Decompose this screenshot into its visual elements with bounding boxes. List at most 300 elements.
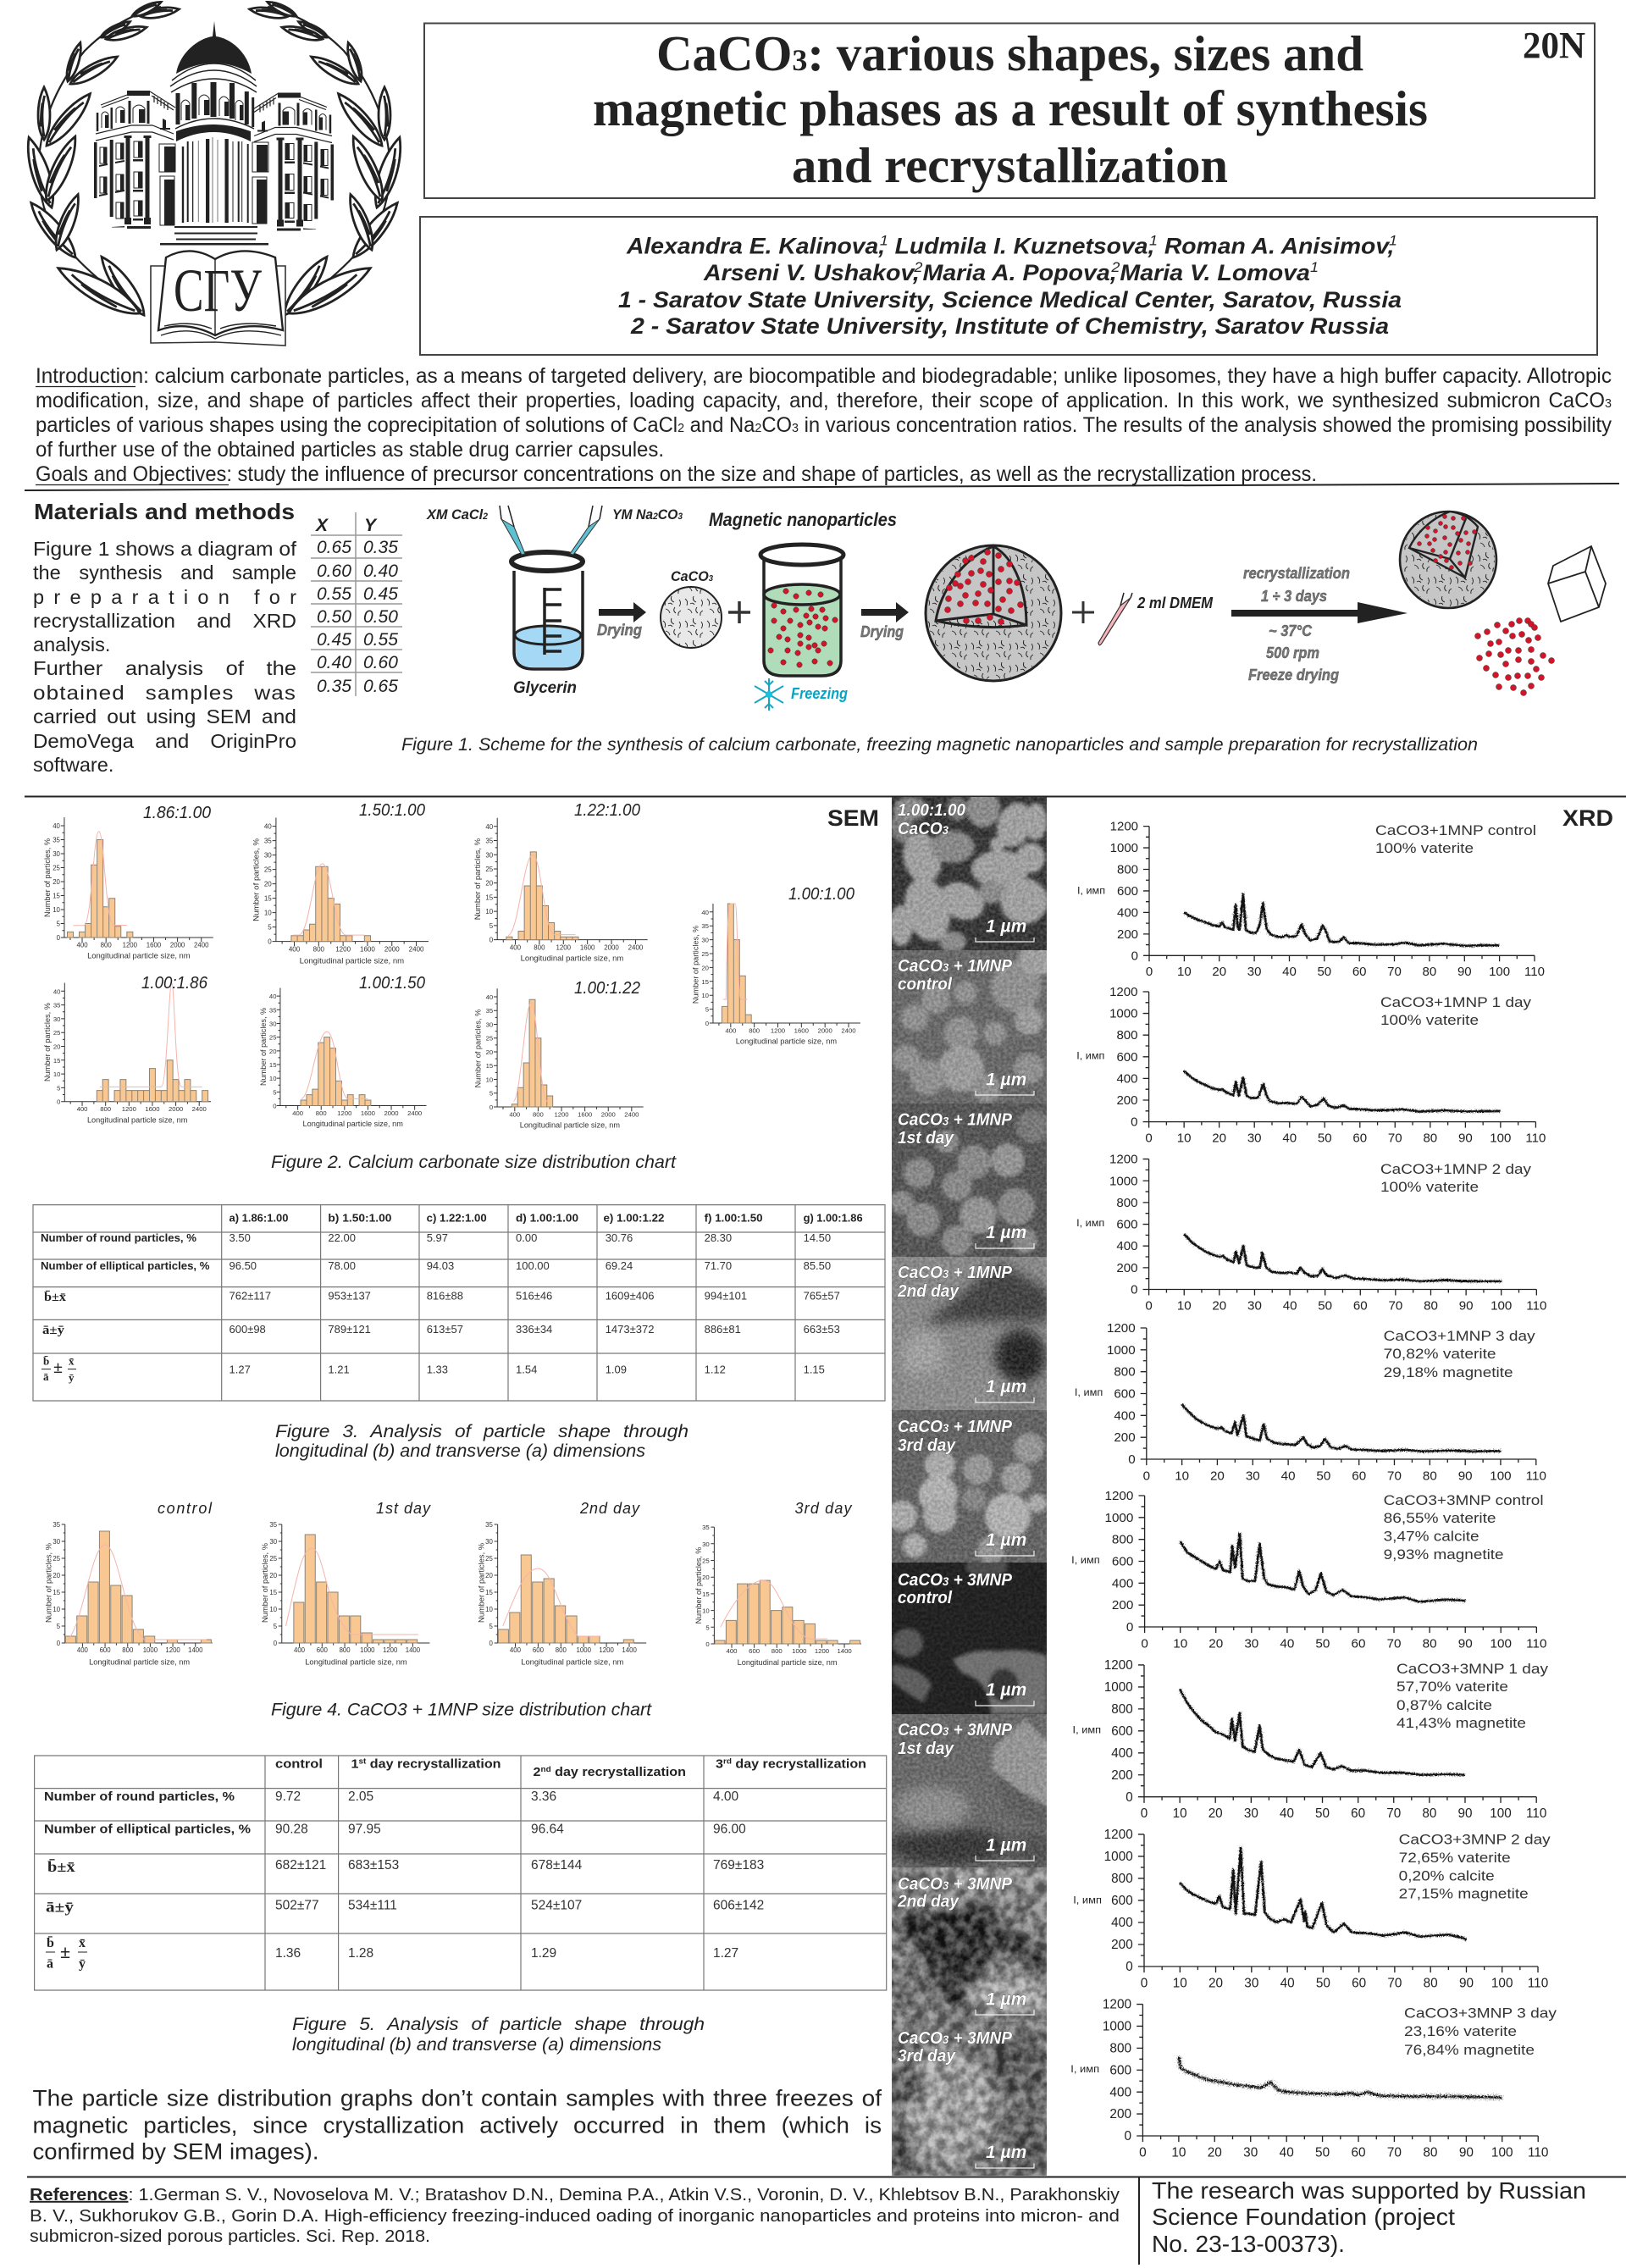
chart: histogram 3rd day: 800 xyxy=(772,1647,783,1655)
chart: histogram 1.00:1.22: 30 xyxy=(486,1021,493,1028)
chart: histogram control: Longitudinal particle size, nm xyxy=(89,1658,190,1667)
table: particle shape analysis figure 5: nd xyxy=(540,1765,551,1773)
chart: histogram 1.00:1.00: 25 xyxy=(701,950,709,958)
arrow: second drying: Drying xyxy=(860,623,904,640)
chart: XRD CaCO3+3MNP 2 day: 1000 xyxy=(1104,1850,1133,1864)
table: particle shape analysis figure 3: 0.00 xyxy=(516,1231,537,1244)
text block: materials and methods: software. xyxy=(33,754,113,776)
chart: histogram 1.00:1.22: 25 xyxy=(486,1035,493,1043)
chart: histogram 1.00:1.22: 0 xyxy=(489,1104,493,1111)
chart: histogram 1.86:1.00 xyxy=(43,817,213,960)
table: particle shape analysis figure 3: 816±88 xyxy=(427,1289,463,1303)
table: X and Y concentrations: 0.55 xyxy=(363,630,398,650)
chart: XRD CaCO3+3MNP 3 day: 110 xyxy=(1528,2145,1548,2160)
text block: introduction and goals: of further use of the obtained particles as stable drug carrier capsules. xyxy=(36,438,664,462)
table: X and Y concentrations: 0.40 xyxy=(363,561,398,581)
chart: histogram 1.22:1.00 xyxy=(473,818,648,962)
chart: XRD CaCO3+3MNP 2 day xyxy=(1073,1828,1548,1990)
chart: XRD CaCO3+3MNP 2 day: 40 xyxy=(1280,1976,1295,1990)
chart label: 1.00:1.50: 1.00:1.50 xyxy=(359,974,425,993)
table: particle shape analysis figure 3: 600±98 xyxy=(229,1323,266,1336)
icon: snowflake and freezing label xyxy=(755,678,848,711)
chart: XRD CaCO3+3MNP 3 day: 400 xyxy=(1109,2085,1131,2099)
chart: histogram 1.50:1.00: 800 xyxy=(313,945,325,953)
arrow: first drying: Drying xyxy=(597,622,642,639)
chart: XRD CaCO3+3MNP 2 day: I, имп xyxy=(1073,1895,1102,1906)
table: particle shape analysis figure 3: 516±46 xyxy=(516,1289,552,1303)
panel: SEM CaCO3 + 3MNP 2nd day: 2nd day xyxy=(897,1892,960,1911)
text block: materials and methods: the synthesis and sample xyxy=(33,561,296,584)
chart: histogram 2nd day: 15 xyxy=(485,1589,494,1596)
chart label: 3MNP 2 day composition: 0,20% calcite xyxy=(1399,1868,1495,1884)
chart: histogram 2nd day: 35 xyxy=(485,1521,494,1529)
panel: authors and affiliations: Maria V. Lomova xyxy=(1120,260,1310,285)
chart: histogram 1.00:1.86: 20 xyxy=(53,1043,60,1050)
chart: XRD CaCO3+1MNP 2 day: 1000 xyxy=(1109,1174,1138,1188)
table: particle shape analysis figure 5: 4.00 xyxy=(713,1790,739,1804)
icon: particle with magnetic nanoparticles in wedge xyxy=(926,545,1061,681)
table: particle shape analysis figure 5: Number of elliptical particles, % xyxy=(44,1823,251,1837)
table: particle shape analysis figure 3: 71.70 xyxy=(705,1259,732,1272)
chart label: 3MNP 1 day composition: 57,70% vaterite xyxy=(1396,1679,1508,1695)
table: particle shape analysis figure 3: 1.54 xyxy=(516,1364,537,1376)
chart: XRD CaCO3+1MNP control: 10 xyxy=(1177,965,1192,979)
table: particle shape analysis figure 3: 1.15 xyxy=(804,1364,825,1376)
chart: XRD CaCO3+1MNP 1 day: 800 xyxy=(1116,1028,1138,1043)
chart: XRD CaCO3+1MNP control: 1200 xyxy=(1110,820,1138,834)
panel: authors and affiliations: Roman A. Anisimov, xyxy=(1158,234,1394,259)
chart: histogram control: 600 xyxy=(100,1646,111,1654)
table: particle shape analysis figure 3: ā xyxy=(43,1370,49,1383)
chart: XRD CaCO3+3MNP 1 day: 90 xyxy=(1458,1806,1472,1821)
chart: histogram 1.00:1.00: 5 xyxy=(705,1006,709,1014)
chart: XRD CaCO3+3MNP 2 day: 90 xyxy=(1459,1976,1474,1990)
chart: histogram 2nd day: 600 xyxy=(533,1646,545,1654)
chart: XRD CaCO3+3MNP control: 1200 xyxy=(1104,1489,1133,1503)
chart: XRD CaCO3+1MNP 1 day: 200 xyxy=(1116,1093,1138,1108)
chart: XRD CaCO3+1MNP control: I, имп xyxy=(1077,884,1105,896)
chart label: 1MNP control composition: CaCO3+1MNP control xyxy=(1375,822,1536,838)
chart: histogram 1.86:1.00: 10 xyxy=(53,906,61,914)
panel: SEM CaCO3 + 3MNP control xyxy=(892,1557,1047,1714)
text block: funding acknowledgement: Science Foundation (project xyxy=(1152,2204,1455,2230)
chart: histogram 1.00:1.86: Number of particles, % xyxy=(43,1003,52,1081)
chart: histogram 1st day: 0 xyxy=(274,1640,278,1647)
caption: figure 3: longitudinal (b) and transverse (a) dimensions xyxy=(275,1441,645,1461)
text block: note on distribution graphs: The particle size distribution graphs don’t contain samples with three freezes of xyxy=(32,2086,882,2111)
table: particle shape analysis figure 5: b̄ xyxy=(47,1934,54,1950)
table: particle shape analysis figure 3: 953±137 xyxy=(328,1289,371,1303)
chart: XRD CaCO3+1MNP 2 day: 110 xyxy=(1526,1299,1546,1314)
text block: references: References : 1.German S. V., Novoselova M. V.; Bratashov D.N., Demina P.A., Atkin V.S., Voronin, D. V., Khlebtsov B.N., Parakhonskiy xyxy=(30,2186,1120,2204)
chart: histogram 1.22:1.00: 400 xyxy=(510,943,522,951)
panel: authors and affiliations: 1 xyxy=(880,233,888,249)
table: particle shape analysis figure 5: day recrystallization xyxy=(366,1758,501,1772)
chart: histogram 1.00:1.22: 400 xyxy=(509,1110,520,1118)
icon: recrystallized particle xyxy=(1400,512,1496,608)
table: particle shape analysis figure 5: 1.27 xyxy=(713,1946,738,1961)
chart: XRD CaCO3+1MNP 1 day: 110 xyxy=(1525,1131,1546,1146)
table: particle shape analysis figure 3: 3.50 xyxy=(229,1231,251,1244)
chart: histogram control: 1000 xyxy=(143,1646,158,1654)
chart: histogram 1.00:1.22: 40 xyxy=(486,993,493,1001)
chart: histogram 1st day: 400 xyxy=(294,1646,306,1654)
table: particle shape analysis figure 5: 1 xyxy=(351,1758,358,1772)
text block: introduction and goals: Goals and Objectives: study the influence of precursor concentrations on the size and shape of particles, as well as the recrystallization process. xyxy=(36,462,1317,486)
chart: histogram 1.50:1.00: 2400 xyxy=(409,945,424,953)
chart: XRD CaCO3+3MNP 1 day: 60 xyxy=(1351,1806,1365,1821)
table: particle shape analysis figure 3: b̄±x̄ xyxy=(44,1291,67,1304)
table: particle shape analysis figure 5: 1.36 xyxy=(275,1946,301,1961)
chart label: 3MNP control composition: 3,47% calcite xyxy=(1384,1528,1479,1544)
chart: XRD CaCO3+1MNP 2 day: 200 xyxy=(1116,1261,1138,1275)
chart: XRD CaCO3+3MNP control: 50 xyxy=(1315,1636,1330,1651)
table: X and Y concentrations: 0.45 xyxy=(317,630,351,650)
chart: histogram 1.50:1.00: 40 xyxy=(264,823,272,831)
chart: histogram 1.86:1.00: 20 xyxy=(53,878,61,886)
chart: histogram 1.00:1.50: 1200 xyxy=(337,1109,351,1117)
arrow: recrystallization conditions: 1 ÷ 3 days xyxy=(1261,588,1327,605)
chart: histogram 1.86:1.00: 0 xyxy=(57,934,61,942)
chart: XRD CaCO3+1MNP 2 day: 70 xyxy=(1388,1299,1402,1314)
chart: XRD CaCO3+1MNP 1 day: 100 xyxy=(1490,1131,1511,1146)
chart: histogram 3rd day: 30 xyxy=(702,1541,710,1548)
chart: histogram 3rd day: 35 xyxy=(702,1524,710,1531)
chart: histogram 2nd day: Longitudinal particle size, nm xyxy=(521,1658,623,1667)
caption: figure 3 xyxy=(275,1422,689,1461)
chart: histogram 1.22:1.00: 35 xyxy=(485,838,494,845)
chart: histogram 1.00:1.50: 5 xyxy=(273,1088,276,1096)
chart: XRD CaCO3+1MNP 1 day: 0 xyxy=(1145,1131,1153,1146)
arrow: second drying xyxy=(860,602,909,640)
panel: SEM CaCO3 + 1MNP 3rd day xyxy=(887,1410,1047,1563)
chart: histogram 1st day: Number of particles, % xyxy=(261,1543,269,1623)
chart: histogram 1.00:1.50: Longitudinal particle size, nm xyxy=(303,1120,403,1128)
chart: histogram 1.00:1.22: 15 xyxy=(486,1062,493,1070)
chart: XRD CaCO3+3MNP 1 day: 10 xyxy=(1173,1806,1187,1821)
chart: XRD CaCO3+3MNP 1 day: 1000 xyxy=(1104,1680,1133,1695)
chart: histogram 1.22:1.00: 2000 xyxy=(604,943,619,951)
chart: XRD CaCO3+3MNP 3 day: 1000 xyxy=(1103,2020,1131,2034)
caption: figure 1: Figure 1. Scheme for the synthesis of calcium carbonate, freezing magnetic nanoparticles and sample preparation for recrystallization xyxy=(401,735,1478,755)
table: particle shape analysis figure 3: 78.00 xyxy=(328,1259,356,1272)
chart: histogram 1.22:1.00: 1600 xyxy=(580,943,595,951)
chart label: 3MNP control composition: CaCO3+3MNP control xyxy=(1384,1492,1544,1508)
chart: histogram 1.00:1.00: 2400 xyxy=(841,1026,856,1034)
chart: XRD CaCO3+1MNP 3 day: 400 xyxy=(1114,1408,1136,1423)
chart: histogram 3rd day: 25 xyxy=(702,1557,710,1564)
panel: title box xyxy=(424,24,1595,198)
icon: snowflake and freezing label: Freezing xyxy=(791,685,848,702)
table: particle shape analysis figure 5: 678±144 xyxy=(531,1858,583,1872)
chart: XRD CaCO3+1MNP 3 day: 800 xyxy=(1114,1365,1136,1380)
chart: histogram 2nd day xyxy=(477,1521,646,1667)
panel: SEM CaCO3 + 3MNP 2nd day xyxy=(888,1866,1047,2022)
text block: introduction and goals: Introduction: calcium carbonate particles, as a means of targeted delivery, are biocompatible and biodegradable; unlike liposomes, they have a high buffer capacity. Allotropic xyxy=(36,364,1612,388)
chart: histogram 1.00:1.50: 40 xyxy=(269,993,276,1000)
chart: XRD CaCO3+3MNP 1 day: 40 xyxy=(1280,1806,1294,1821)
table: particle shape analysis figure 3: d) 1.00:1.00 xyxy=(516,1213,578,1225)
chart: XRD CaCO3+1MNP 2 day: 100 xyxy=(1490,1299,1512,1314)
chart label: 3MNP 3 day composition: CaCO3+3MNP 3 day xyxy=(1404,2005,1557,2022)
chart: histogram 1.00:1.00 xyxy=(692,904,860,1045)
chart label: 1MNP 1 day composition xyxy=(1380,994,1532,1028)
panel: SEM CaCO3 + 1MNP 1st day: 1 µm xyxy=(986,1223,1026,1242)
table: particle shape analysis figure 3: 886±81 xyxy=(705,1323,741,1336)
chart: XRD CaCO3+1MNP 3 day: 110 xyxy=(1526,1469,1546,1483)
chart: XRD CaCO3+3MNP 2 day: 600 xyxy=(1111,1894,1133,1908)
arrow: recrystallization conditions: Freeze drying xyxy=(1248,667,1339,683)
table: particle shape analysis figure 3: ȳ xyxy=(69,1371,75,1384)
chart: XRD CaCO3+1MNP 3 day: 100 xyxy=(1490,1469,1512,1483)
chart label: 3MNP control composition: 86,55% vaterite xyxy=(1384,1510,1496,1526)
chart: histogram 2nd day: 30 xyxy=(485,1538,494,1546)
table: particle shape analysis figure 3: 762±117 xyxy=(229,1289,271,1303)
chart: histogram 1st day: 600 xyxy=(317,1646,328,1654)
text block: references: submicron-sized porous particles. Sci. Rep. 2018. xyxy=(30,2227,430,2246)
text block: references: B. V., Sukhorukov G.B., Gorin D.A. High-efficiency freezing-induced oading of inorganic nanoparticles and proteins into micron- and xyxy=(30,2207,1120,2226)
icon: pipettes and glycerin beaker xyxy=(500,506,602,669)
icon: CaCO3 particle: CaCO3 xyxy=(671,568,713,584)
chart: histogram 3rd day: 0 xyxy=(705,1640,710,1648)
table: particle shape analysis figure 3: 336±34 xyxy=(516,1323,552,1336)
chart: XRD CaCO3+3MNP 1 day: 600 xyxy=(1111,1724,1133,1739)
panel: SEM CaCO3 + 3MNP 3rd day: CaCO3 + 3MNP xyxy=(898,2029,1013,2048)
chart: histogram 1.00:1.00: Longitudinal particle size, nm xyxy=(736,1037,837,1045)
chart: histogram 1.00:1.86: 1200 xyxy=(122,1105,136,1113)
table: particle shape analysis figure 5: ± xyxy=(60,1941,70,1962)
chart: XRD CaCO3+1MNP 1 day: I, имп xyxy=(1076,1049,1104,1061)
chart: histogram 1.00:1.50: 30 xyxy=(269,1020,276,1027)
chart: histogram 1.86:1.00: 400 xyxy=(77,942,88,949)
chart: XRD CaCO3+1MNP 3 day: 90 xyxy=(1458,1469,1473,1483)
chart label: 3rd day: 3rd day xyxy=(794,1500,852,1517)
chart: histogram 1.00:1.00: 35 xyxy=(701,922,709,930)
chart: histogram 1st day: 1400 xyxy=(406,1646,421,1654)
chart: histogram 3rd day: 20 xyxy=(702,1574,710,1581)
chart: histogram 3rd day: Number of particles, % xyxy=(694,1547,703,1624)
chart: histogram 1.00:1.50: 0 xyxy=(273,1102,276,1109)
chart label: 1MNP 2 day composition: 100% vaterite xyxy=(1380,1179,1479,1195)
chart label: 1MNP 3 day composition: 70,82% vaterite xyxy=(1384,1346,1496,1362)
chart label: 3MNP 3 day composition: 23,16% vaterite xyxy=(1404,2023,1517,2039)
chart: XRD CaCO3+1MNP 3 day: 200 xyxy=(1114,1430,1136,1445)
chart: histogram 3rd day: 1200 xyxy=(815,1647,829,1655)
chart: XRD CaCO3+3MNP 1 day: 80 xyxy=(1422,1806,1436,1821)
chart: histogram 2nd day: 1000 xyxy=(576,1646,592,1654)
panel: authors and affiliations: 2 - Saratov State University, Institute of Chemistry, Saratov Russia xyxy=(630,313,1389,339)
chart: histogram control: 0 xyxy=(57,1640,61,1647)
chart: XRD CaCO3+3MNP 3 day: I, имп xyxy=(1070,2063,1099,2075)
chart label: 3MNP 3 day composition: 76,84% magnetite xyxy=(1404,2042,1535,2058)
chart: histogram 2nd day: 400 xyxy=(510,1646,522,1654)
chart: XRD CaCO3+1MNP 1 day: 30 xyxy=(1247,1131,1262,1146)
panel: SEM CaCO3 + 1MNP 3rd day: 1 µm xyxy=(986,1530,1026,1550)
panel: SEM CaCO3 + 1MNP 2nd day xyxy=(892,1257,1050,1410)
chart: histogram 1st day: Longitudinal particle size, nm xyxy=(305,1658,407,1667)
chart: histogram 1.00:1.50: 800 xyxy=(316,1109,327,1117)
arrow: recrystallization conditions: ~ 37°C xyxy=(1269,622,1313,639)
table: X and Y concentrations: 0.35 xyxy=(317,677,351,696)
chart: XRD CaCO3+1MNP control: 400 xyxy=(1117,905,1138,920)
chart: histogram 1.00:1.86: 800 xyxy=(100,1105,111,1113)
panel: SEM CaCO3 + 3MNP 1st day xyxy=(889,1714,1059,1869)
chart label: 1st day: 1st day xyxy=(376,1500,431,1517)
table: particle shape analysis figure 3: b̄ xyxy=(43,1355,49,1368)
panel: authors and affiliations: Alexandra E. Kalinova, xyxy=(627,234,873,259)
chart: histogram 2nd day: 1400 xyxy=(622,1646,637,1654)
table: particle shape analysis figure 3: b) 1.50:1.00 xyxy=(328,1213,391,1225)
chart: XRD CaCO3+1MNP 2 day: 600 xyxy=(1116,1218,1138,1232)
chart: histogram 1.00:1.86: 400 xyxy=(77,1105,87,1113)
chart: XRD CaCO3+3MNP 1 day: 800 xyxy=(1111,1702,1133,1717)
chart: XRD CaCO3+1MNP 2 day: 60 xyxy=(1353,1299,1368,1314)
chart: histogram 1.00:1.86: 10 xyxy=(53,1070,60,1078)
chart: XRD CaCO3+1MNP 1 day: 1000 xyxy=(1109,1007,1138,1021)
chart: histogram 1.00:1.22: 2400 xyxy=(624,1110,639,1118)
chart label: 1MNP control composition: 100% vaterite xyxy=(1375,840,1474,856)
chart: XRD CaCO3+3MNP control: 70 xyxy=(1387,1636,1402,1651)
chart: XRD CaCO3+3MNP 2 day: 10 xyxy=(1173,1976,1187,1990)
chart: histogram 1st day xyxy=(261,1521,429,1667)
chart: histogram 1.86:1.00: 1600 xyxy=(147,942,162,949)
chart: XRD CaCO3+3MNP control: 200 xyxy=(1112,1598,1133,1612)
text block: materials and methods: analysis. xyxy=(33,633,110,656)
table: particle shape analysis figure 3: 96.50 xyxy=(229,1259,257,1272)
table: X and Y concentrations: 0.45 xyxy=(363,584,398,604)
table: particle shape analysis figure 5: 9.72 xyxy=(275,1790,301,1804)
chart label: 1MNP 3 day composition: CaCO3+1MNP 3 day xyxy=(1384,1328,1535,1344)
chart: histogram 1.00:1.22: Longitudinal particle size, nm xyxy=(520,1121,620,1130)
chart label: 3MNP 2 day composition xyxy=(1399,1832,1551,1902)
chart: XRD CaCO3+3MNP control: 600 xyxy=(1112,1555,1133,1569)
label: XM CaCl2: XM CaCl2 xyxy=(426,506,488,523)
chart: histogram 1.22:1.00: 1200 xyxy=(556,943,572,951)
chart: XRD CaCO3+1MNP 2 day xyxy=(1076,1153,1546,1314)
text block: materials and methods xyxy=(33,538,296,776)
chart: XRD CaCO3+3MNP control: 80 xyxy=(1423,1636,1437,1651)
panel: SEM CaCO3 + 1MNP control: 1 µm xyxy=(986,1070,1026,1090)
icon: CaCO3 particle xyxy=(661,568,722,648)
table: particle shape analysis figure 3: 30.76 xyxy=(606,1231,633,1244)
chart label: 3MNP 1 day composition: CaCO3+3MNP 1 day xyxy=(1396,1661,1549,1677)
chart: XRD CaCO3+3MNP control: 40 xyxy=(1280,1636,1294,1651)
text block: materials and methods: obtained samples was xyxy=(33,682,296,704)
poster number: 20N xyxy=(1523,25,1585,66)
table: particle shape analysis figure 3: x̄ xyxy=(69,1355,75,1368)
table: particle shape analysis figure 3: c) 1.22:1.00 xyxy=(427,1213,487,1225)
chart: histogram 1.22:1.00: 15 xyxy=(485,893,494,901)
chart: XRD CaCO3+1MNP control: 1000 xyxy=(1110,841,1138,855)
text block: materials and methods: recrystallization and XRD xyxy=(33,610,296,632)
chart label: 3MNP 1 day composition xyxy=(1396,1661,1549,1731)
chart: XRD CaCO3+3MNP 1 day: 110 xyxy=(1526,1806,1546,1821)
table: particle shape analysis figure 3: 994±101 xyxy=(705,1289,747,1303)
table: particle shape analysis figure 5: st xyxy=(358,1756,366,1765)
chart label: 1.50:1.00: 1.50:1.00 xyxy=(359,801,425,820)
table: X and Y concentrations: 0.55 xyxy=(317,584,351,604)
chart: histogram control: 1200 xyxy=(165,1646,180,1654)
chart: histogram 1.00:1.00: 1200 xyxy=(771,1026,785,1034)
chart: histogram 1st day: 1200 xyxy=(383,1646,398,1654)
chart: XRD CaCO3+1MNP 2 day: 50 xyxy=(1318,1299,1332,1314)
chart: XRD CaCO3+1MNP 2 day: 20 xyxy=(1212,1299,1226,1314)
chart: histogram 1.00:1.00: 40 xyxy=(701,909,709,916)
chart label: 3MNP 2 day composition: CaCO3+3MNP 2 day xyxy=(1399,1832,1551,1848)
heading: materials and methods: Materials and methods xyxy=(34,499,295,524)
chart: histogram 1.50:1.00 xyxy=(252,817,429,965)
chart: histogram control: 20 xyxy=(53,1572,61,1579)
chart label: control: control xyxy=(158,1500,213,1517)
chart: histogram 1.50:1.00: 2000 xyxy=(384,945,400,953)
chart: XRD CaCO3+1MNP 3 day: 40 xyxy=(1281,1469,1296,1483)
table: particle shape analysis figure 3: 5.97 xyxy=(427,1231,448,1244)
chart: XRD CaCO3+3MNP 1 day: 30 xyxy=(1244,1806,1258,1821)
chart: XRD CaCO3+1MNP 3 day: 10 xyxy=(1175,1469,1189,1483)
title xyxy=(593,25,1428,193)
chart: XRD CaCO3+3MNP control xyxy=(1071,1489,1546,1651)
chart: histogram 1.86:1.00: Number of particles, % xyxy=(43,838,52,917)
table: particle shape analysis figure 3: 1473±372 xyxy=(606,1323,654,1336)
table: X and Y concentrations xyxy=(311,512,402,696)
chart: histogram 1.00:1.50: 20 xyxy=(269,1048,276,1055)
chart: histogram 1.00:1.86: 1600 xyxy=(145,1105,159,1113)
chart: XRD CaCO3+3MNP 1 day: 20 xyxy=(1208,1806,1223,1821)
arrow: first drying xyxy=(597,602,646,639)
chart: XRD CaCO3+3MNP 2 day: 60 xyxy=(1352,1976,1366,1990)
chart: histogram 1.00:1.86: 25 xyxy=(53,1029,60,1037)
chart: XRD CaCO3+1MNP 1 day: 10 xyxy=(1177,1131,1192,1146)
table: particle shape analysis figure 5: 524±107 xyxy=(531,1899,582,1912)
chart: XRD CaCO3+1MNP 1 day: 0 xyxy=(1131,1115,1138,1130)
table: particle shape analysis figure 3: 1.12 xyxy=(705,1364,726,1376)
label: YM Na2CO3: YM Na2CO3 xyxy=(612,506,683,523)
chart: histogram 1.00:1.50: 25 xyxy=(269,1034,276,1042)
caption: figure 5: Figure 5. Analysis of particle shape through xyxy=(292,2015,705,2034)
table: X and Y concentrations: 0.50 xyxy=(363,607,398,627)
arrow: recrystallization conditions: 500 rpm xyxy=(1266,644,1319,661)
text block: funding acknowledgement: No. 23-13-00373). xyxy=(1152,2231,1345,2257)
table: X and Y concentrations: 0.65 xyxy=(317,538,351,557)
chart: XRD CaCO3+1MNP control: 600 xyxy=(1117,884,1138,899)
chart: histogram 1.00:1.86: 15 xyxy=(53,1057,60,1065)
chart: XRD CaCO3+1MNP 1 day: 1200 xyxy=(1109,985,1138,999)
chart: XRD CaCO3+3MNP 2 day: 110 xyxy=(1528,1976,1548,1990)
chart: XRD CaCO3+3MNP 1 day: 200 xyxy=(1111,1768,1133,1783)
chart: histogram 1.00:1.22: 20 xyxy=(486,1048,493,1056)
chart: XRD CaCO3+3MNP 1 day: I, имп xyxy=(1073,1723,1101,1735)
chart: histogram 1.50:1.00: 20 xyxy=(264,881,272,888)
chart: histogram 1.86:1.00: 2000 xyxy=(170,942,185,949)
chart: histogram 1st day: 5 xyxy=(274,1623,278,1630)
chart label: 1.00:1.22: 1.00:1.22 xyxy=(574,979,640,998)
title: magnetic phases as a result of synthesis xyxy=(593,80,1428,136)
table: particle shape analysis figure 3: 100.00 xyxy=(516,1259,550,1272)
chart: histogram 1.00:1.22: Number of particles, % xyxy=(473,1010,482,1087)
chart: histogram 1st day: 10 xyxy=(269,1606,278,1613)
chart: XRD CaCO3+3MNP 3 day xyxy=(1070,1998,1548,2160)
chart: figure 1 synthesis scheme xyxy=(426,506,1606,711)
table: X and Y concentrations: Y xyxy=(364,516,378,535)
chart: XRD CaCO3+1MNP 2 day: 0 xyxy=(1131,1283,1138,1297)
chart: XRD CaCO3+3MNP 2 day: 50 xyxy=(1316,1976,1330,1990)
chart: XRD CaCO3+1MNP 2 day: 1200 xyxy=(1109,1153,1138,1167)
chart: histogram 2nd day: Number of particles, % xyxy=(477,1543,485,1623)
panel: authors and affiliations: 1 xyxy=(1389,233,1397,249)
panel: authors and affiliations: Arseni V. Ushakov, xyxy=(704,260,908,285)
chart: histogram 1.00:1.50: 35 xyxy=(269,1006,276,1014)
chart: XRD CaCO3+3MNP 3 day: 20 xyxy=(1208,2145,1222,2160)
